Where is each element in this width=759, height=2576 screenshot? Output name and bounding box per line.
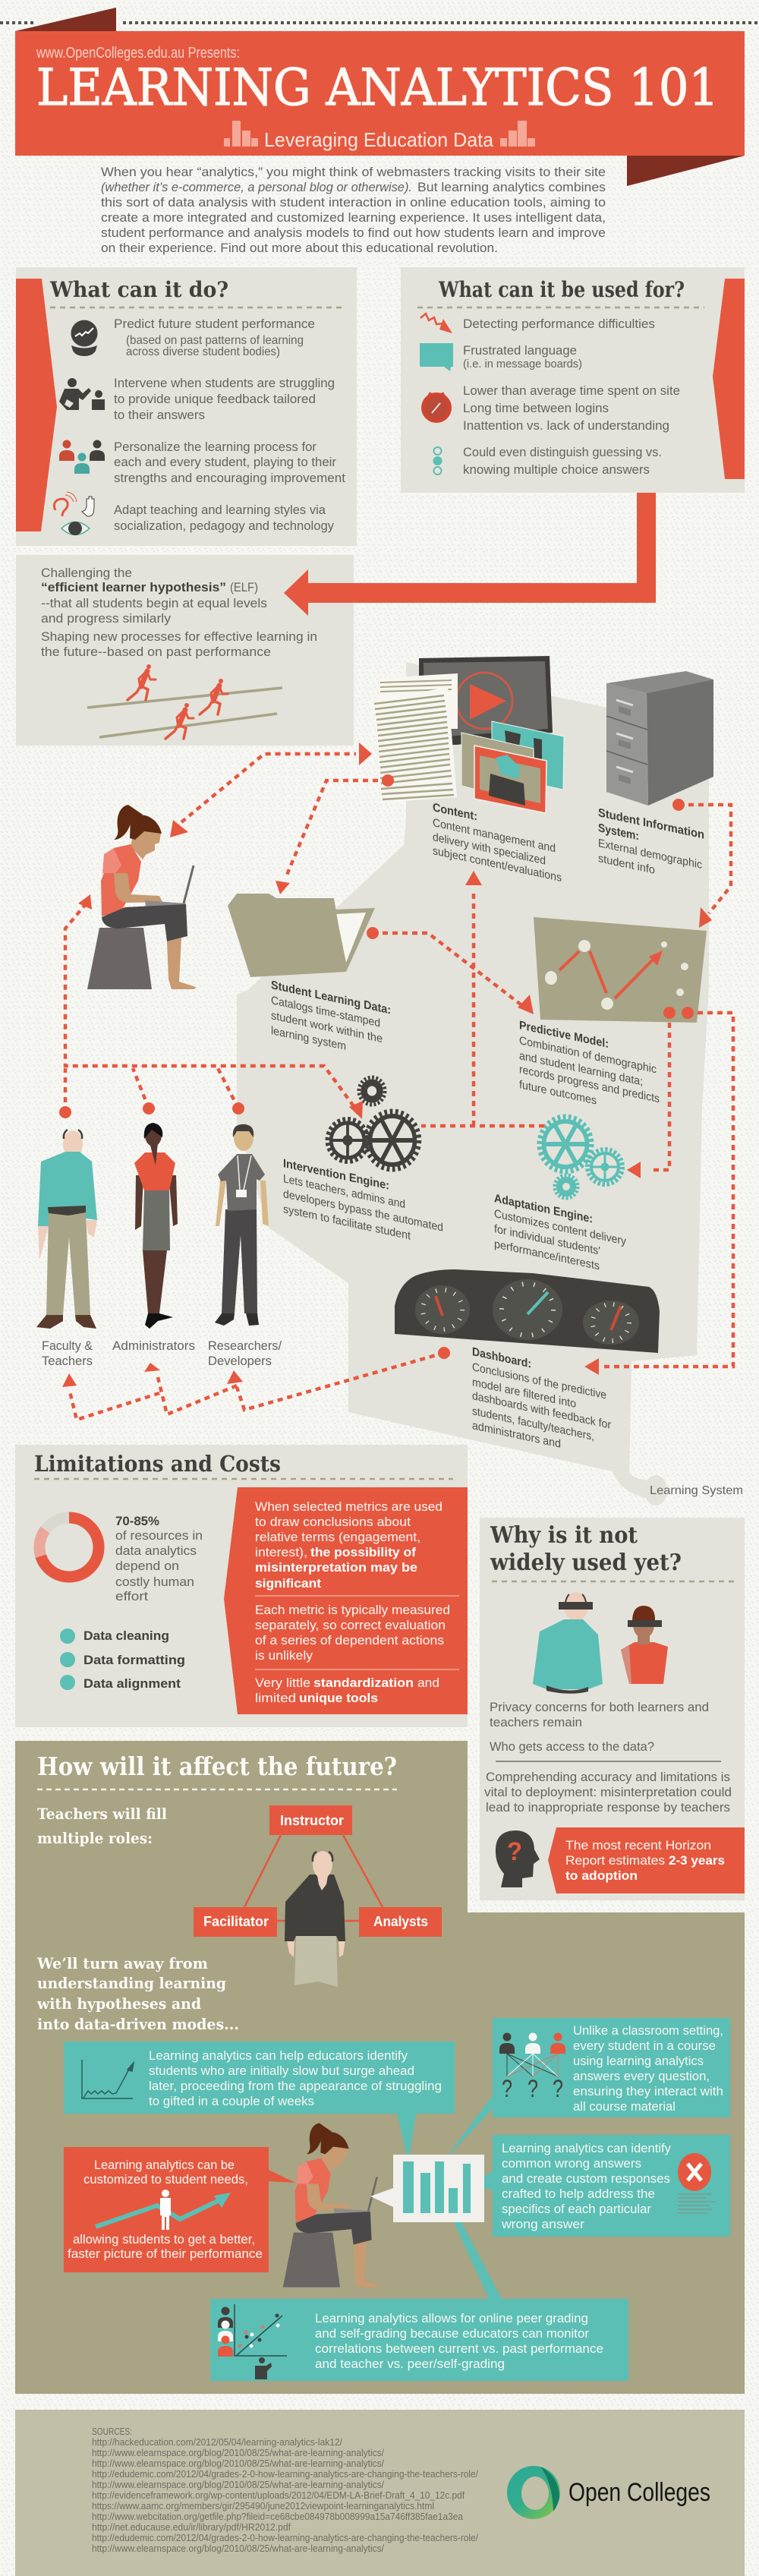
icon: students and questions: ? [528,2075,538,2102]
subheading: roles [37,1805,167,1847]
item: time: Inattention vs. lack of understanding [463,418,669,433]
label: predictive model [519,1019,660,1108]
icon: multiple choice [434,447,442,475]
subheading: roles: Teachers will fill [37,1805,167,1823]
panel: efficient learner hypothesis: Shaping new processes for effective learning in [41,629,317,644]
item: predict: across diverse student bodies) [126,345,280,358]
icon: runners on tracks [87,664,282,739]
item: time: Lower than average time spent on site [463,383,680,398]
item: time: Long time between logins [463,401,609,415]
label: student learning data [271,979,391,1053]
item: adapt [114,503,334,533]
label: learning system: Learning System [650,1484,743,1497]
role: facilitator: Facilitator [203,1914,269,1929]
label: adaptation engine: Adaptation Engine: [494,1192,593,1226]
heading: Limitations and Costs [34,1451,281,1477]
item: personalize: Personalize the learning process for [114,440,317,454]
panel: efficient learner hypothesis: “efficient learner hypothesis” [41,580,226,594]
icon: documents [373,673,458,802]
heading: What can it do? [49,277,228,302]
horizon callout: to adoption [565,1868,638,1883]
logo: open colleges: Open Colleges [568,2478,710,2507]
icon: ear hand eye [54,492,94,535]
icon: head with question mark [496,1830,540,1887]
red callout: significant [255,1576,321,1591]
icon: three people [59,440,105,474]
icon: teacher figure [285,1851,345,1987]
source list [92,2426,478,2554]
stat text: effort [115,1589,148,1603]
main title: LEARNING ANALYTICS 101 [36,58,719,117]
panel: sources [15,2410,745,2576]
red callout: relative terms (engagement, [255,1530,420,1544]
body text: Privacy concerns for both learners and [490,1700,709,1714]
role labels: Administrators [112,1338,195,1353]
panel: efficient learner hypothesis: the future--based on past performance [41,645,271,659]
callout: peer grading: Learning analytics allows for online peer grading [315,2311,588,2325]
item: intervene [114,376,335,422]
callout: customized: customized to student needs, [83,2172,248,2187]
role: instructor: Instructor [280,1813,344,1828]
item: time [463,383,680,433]
arrow: red connector [284,493,656,616]
label: dashboard [472,1345,611,1451]
icon: learning system connector [607,1461,667,1506]
item: personalize: each and every student, playing to their [114,455,336,469]
horizon callout [548,1827,745,1893]
label: content: Content management and [433,816,556,855]
intro paragraph: When you hear “analytics,” you might think of webmasters tracking visits to their site [101,165,606,179]
red callout: to draw conclusions about [255,1515,411,1529]
icon: students and questions: ? [553,2075,563,2102]
red callout: separately, so correct evaluation [255,1618,446,1632]
icon: stopwatch [421,393,452,423]
body text: vital to deployment: misinterpretation could [484,1785,732,1799]
heading: How will it affect the future? [37,1751,397,1781]
red callout: the possibility of [310,1545,416,1559]
intro paragraph: on their experience. Find out more about this educational revolution. [101,241,498,255]
red callout: and [417,1676,439,1690]
label: student information system: student info [598,852,655,877]
icon: teal gears [540,1117,622,1198]
icon: bar chart card [370,2155,484,2222]
source list: http://edudemic.com/2012/04/grades-2-0-how-learning-analytics-are-changing-the-teachers-role/ [92,2532,478,2543]
panel: efficient learner hypothesis: (ELF) [230,580,258,594]
label: student learning data: Student Learning Data: [271,979,391,1017]
icon: faculty figure [36,1130,97,1329]
label: intervention engine: developers bypass the automated [283,1187,443,1234]
item: guessing: knowing multiple choice answers [463,462,650,477]
item: frustrated: (i.e. in message boards) [463,358,582,370]
intro paragraph [101,165,606,255]
title banner [15,8,745,186]
callout: wrong answers: and create custom responses [502,2171,670,2186]
role: facilitator [194,1907,277,1937]
icon: correlation chart [218,2304,287,2379]
item: frustrated: Frustrated language [463,343,577,358]
source list: http://evidenceframework.org/wp-content/uploads/2012/04/EDM-LA-Brief-Draft_4_10_12c.pdf [92,2489,465,2501]
icon: students and questions [499,2033,565,2102]
callout: slow starters: students who are initially slow but surge ahead [149,2064,414,2078]
icon: dashboard [395,1269,660,1353]
intro paragraph: But learning analytics combines [417,180,606,194]
intro paragraph: this sort of data analysis with student interaction in online education tools, aiming to [101,195,606,210]
callout: customized: allowing students to get a better, [73,2232,255,2247]
label: dashboard: students, faculty/teachers, [472,1405,594,1443]
source list: http://www.elearnspace.org/blog/2010/08/25/what-are-learning-analytics/ [92,2458,384,2469]
source list: http://net.educause.edu/ir/library/pdf/HR2012.pdf [92,2521,291,2533]
item: detecting: Detecting performance difficulties [463,317,655,331]
role labels [42,1338,282,1368]
callout: every question: using learning analytics [573,2054,704,2068]
icon: student progress arrow [96,2190,231,2230]
red callout: limited [255,1691,296,1705]
red callout: standardization [313,1676,414,1690]
item: predict: Predict future student performance [114,317,315,331]
label: predictive model: Predictive Model: [519,1019,609,1051]
body text: Who gets access to the data? [490,1739,654,1754]
label: content: delivery with specialized [433,831,546,868]
panel: why is it not widely used yet [480,1518,745,1900]
body text [484,1700,732,1815]
intro paragraph: student performance and analysis models to find out how students learn and improve [101,225,606,240]
source list: http://www.webcitation.org/getfile.php?fileid=ce68cbe084978b008999a15a746ff385fae1a3ea [92,2511,464,2522]
role: analysts [359,1907,442,1937]
callout: customized [64,2147,295,2272]
label: student information system: Student Information [598,806,704,842]
label: content: subject content/evaluations [433,844,562,884]
subheading: data-driven: understanding learning [37,1974,226,1992]
icon: crystal ball [71,320,97,356]
callout: peer grading: and teacher vs. peer/self-grading [315,2357,505,2371]
item: personalize: strengths and encouraging improvement [114,471,345,485]
role: analysts: Analysts [373,1914,428,1929]
red callout: When selected metrics are used [255,1499,442,1514]
red callout [224,1487,468,1714]
panel: limitations and costs [15,1445,468,1727]
item: adapt: socialization, pedagogy and technology [114,519,334,533]
intro paragraph: create a more integrated and customized learning experience. It uses intelligent data, [101,210,606,225]
source list: http://www.elearnspace.org/blog/2010/08/25/what-are-learning-analytics/ [92,2479,384,2490]
role labels: Researchers/ [208,1338,282,1353]
item: adapt: Adapt teaching and learning styles via [114,503,326,517]
subheading: data-driven: with hypotheses and [36,1994,201,2013]
label: predictive model: Combination of demographic [519,1034,657,1077]
donut chart [39,1518,99,1577]
callout: wrong answers: crafted to help address the [502,2187,655,2201]
stat text: costly human [115,1575,194,1589]
icon: student with laptop [283,2123,379,2288]
subtitle: Leveraging Education Data [264,128,494,151]
source list: http://hackeducation.com/2012/05/04/learning-analytics-lak12/ [92,2436,342,2448]
item: guessing [463,445,662,477]
item: predict [114,317,315,358]
red callout: interest), [255,1545,307,1559]
body text: lead to inappropriate response by teachers [486,1800,730,1815]
callout: wrong answers: wrong answer [501,2217,584,2231]
role: instructor [269,1805,352,1835]
label: student information system [598,806,704,877]
label: student learning data: student work within the [271,1009,383,1045]
callout: wrong answers: specifics of each particular [502,2202,651,2216]
source list: http://www.elearnspace.org/blog/2010/08/25/what-are-learning-analytics/ [92,2543,384,2554]
red callout: unique tools [299,1691,378,1705]
heading: Why is it not [490,1522,638,1549]
heading: widely used yet? [490,1550,682,1576]
callout: slow starters: to gifted in a couple of weeks [149,2094,314,2108]
callout: customized: Learning analytics can be [94,2158,235,2172]
icon: subtitle bars [224,121,535,147]
label: predictive model: records progress and predicts [519,1063,660,1105]
role labels: Teachers [42,1354,93,1368]
icon: wrong answer mark [678,2153,716,2213]
icon: file cabinet [606,671,713,806]
callout: wrong answers: Learning analytics can identify [502,2141,671,2155]
presenter line: www.OpenColleges.edu.au Presents: [36,45,240,61]
label: dashboard: Conclusions of the predictive [472,1361,606,1402]
callout: slow starters: later, proceeding from the appearance of struggling [149,2079,442,2093]
stat text: data analytics [115,1543,197,1558]
learning system background shape [237,662,709,1475]
panel: efficient learner hypothesis: Challenging the [41,566,132,580]
label: student learning data: learning system [271,1024,346,1053]
label: intervention engine: Lets teachers, admins and [283,1172,405,1211]
bullet list: Data cleaning [83,1629,169,1643]
label: predictive model: future outcomes [519,1078,597,1108]
panel: efficient learner hypothesis: and progress similarly [41,611,172,626]
body text: Comprehending accuracy and limitations is [486,1770,730,1784]
source list: SOURCES: [92,2426,132,2437]
callout: every question [443,2018,730,2161]
stat text: 70-85% [115,1514,159,1528]
item: intervene: to provide unique feedback tailored [114,392,316,406]
icon: speech bubble [420,343,453,371]
role labels: Developers [208,1354,272,1368]
label: dashboard: administrators and [472,1419,561,1451]
flow arrows [65,754,733,1420]
callout: peer grading [210,2222,628,2381]
icon: surge chart [82,2060,134,2098]
dotted header line [0,21,759,24]
callout: customized: faster picture of their performance [68,2247,263,2261]
panel: efficient learner hypothesis [16,555,354,746]
bullet list [60,1629,185,1691]
source list: http://edudemic.com/2012/04/grades-2-0-how-learning-analytics-are-changing-the-teachers-role/ [92,2468,478,2480]
item: intervene: Intervene when students are struggling [114,376,335,390]
logo: open colleges [507,2466,710,2519]
panel: what can it do [16,267,357,546]
icon: teacher and student [59,378,105,410]
icon: students and questions: ? [502,2075,512,2102]
label: dashboard: Dashboard: [472,1345,531,1371]
chart panel: predictive model [534,917,707,1023]
role diagram [194,1805,442,1987]
flow arrowheads and nodes [59,743,712,1387]
callout: wrong answers: common wrong answers [502,2156,641,2171]
callout: slow starters: Learning analytics can help educators identify [149,2048,408,2063]
subheading: roles: multiple roles: [37,1829,153,1847]
label: predictive model: and student learning data; [519,1049,643,1089]
label: intervention engine [283,1157,443,1243]
heading [490,1522,682,1576]
callout: slow starters [64,2042,455,2161]
stat text: depend on [115,1559,179,1573]
label: adaptation engine: for individual students' [494,1222,600,1258]
red callout: of a series of dependent actions [255,1633,444,1647]
intro paragraph: (whether it’s e-commerce, a personal blog or otherwise). [101,180,412,194]
icon: falling arrow [420,314,452,333]
label: content [433,801,562,884]
bullet list: Data alignment [83,1676,181,1691]
label: intervention engine: Intervention Engine: [283,1157,389,1193]
label: adaptation engine [494,1192,626,1273]
icon: student with laptop [87,805,196,989]
item: intervene: to their answers [114,408,205,422]
label: intervention engine: system to facilitate student [283,1203,411,1243]
red callout: is unlikely [255,1648,313,1663]
subheading: data-driven: into data-driven modes... [37,2015,239,2033]
bullet list: Data formatting [83,1653,185,1667]
callout: every question: every student in a course [573,2038,716,2053]
heading: What can it be used for? [438,277,685,302]
panel: how will it affect the future [15,1741,745,2394]
source list: http://www.elearnspace.org/blog/2010/08/25/what-are-learning-analytics/ [92,2447,384,2458]
icon: dark gears [327,1077,419,1169]
horizon callout: Report estimates [565,1853,665,1868]
callout: every question: all course material [573,2099,676,2114]
subheading: data-driven [36,1954,239,2033]
label: adaptation engine: Customizes content delivery [494,1207,626,1248]
panel: efficient learner hypothesis: --that all students begin at equal levels [41,596,267,610]
icon: head with question mark: ? [507,1837,522,1866]
label: student information system: External demographic [598,837,702,872]
icon: blindfolded people [533,1592,668,1694]
horizon callout: 2-3 years [669,1853,725,1868]
callout: wrong answers [471,2135,730,2237]
label: dashboard: dashboards with feedback for [472,1389,611,1432]
label: student information system: System: [598,821,639,843]
source list: https://www.aamc.org/members/gir/295490/june2012viewpoint-learninganalytics.html [92,2500,434,2511]
icon: researcher figure [215,1124,269,1326]
label: student learning data: Catalogs time-stamped [271,994,380,1030]
icon: folder [228,894,375,977]
item: predict: (based on past patterns of learning [126,334,304,347]
callout: peer grading: correlations between current vs. past performance [315,2341,603,2356]
item: frustrated [463,343,582,370]
horizon callout: The most recent Horizon [565,1838,711,1852]
label: adaptation engine: performance/interests [494,1238,600,1273]
label: content: Content: [433,801,477,823]
red callout: Very little [255,1676,310,1690]
stat text: of resources in [115,1528,203,1543]
icon: administrator figure [134,1123,178,1329]
item: personalize [114,440,345,485]
panel: what can it be used for [401,267,745,493]
icon: photo stack [461,721,564,813]
stat text [115,1514,203,1603]
callout: peer grading: and self-grading because educators can monitor [315,2326,589,2341]
callout: every question: ensuring they interact with [573,2084,723,2098]
body text: teachers remain [490,1715,582,1729]
item: guessing: Could even distinguish guessing vs. [463,445,662,459]
red callout: misinterpretation may be [255,1560,417,1575]
label: dashboard: model are filtered into [472,1376,576,1411]
red callout: Each metric is typically measured [255,1603,450,1617]
icon: monitor with play button [419,656,553,745]
role labels: Faculty & [42,1338,93,1353]
callout: every question: Unlike a classroom setting, [573,2023,723,2038]
subheading: data-driven: We’ll turn away from [36,1954,208,1972]
callout: every question: answers every question, [573,2069,710,2083]
